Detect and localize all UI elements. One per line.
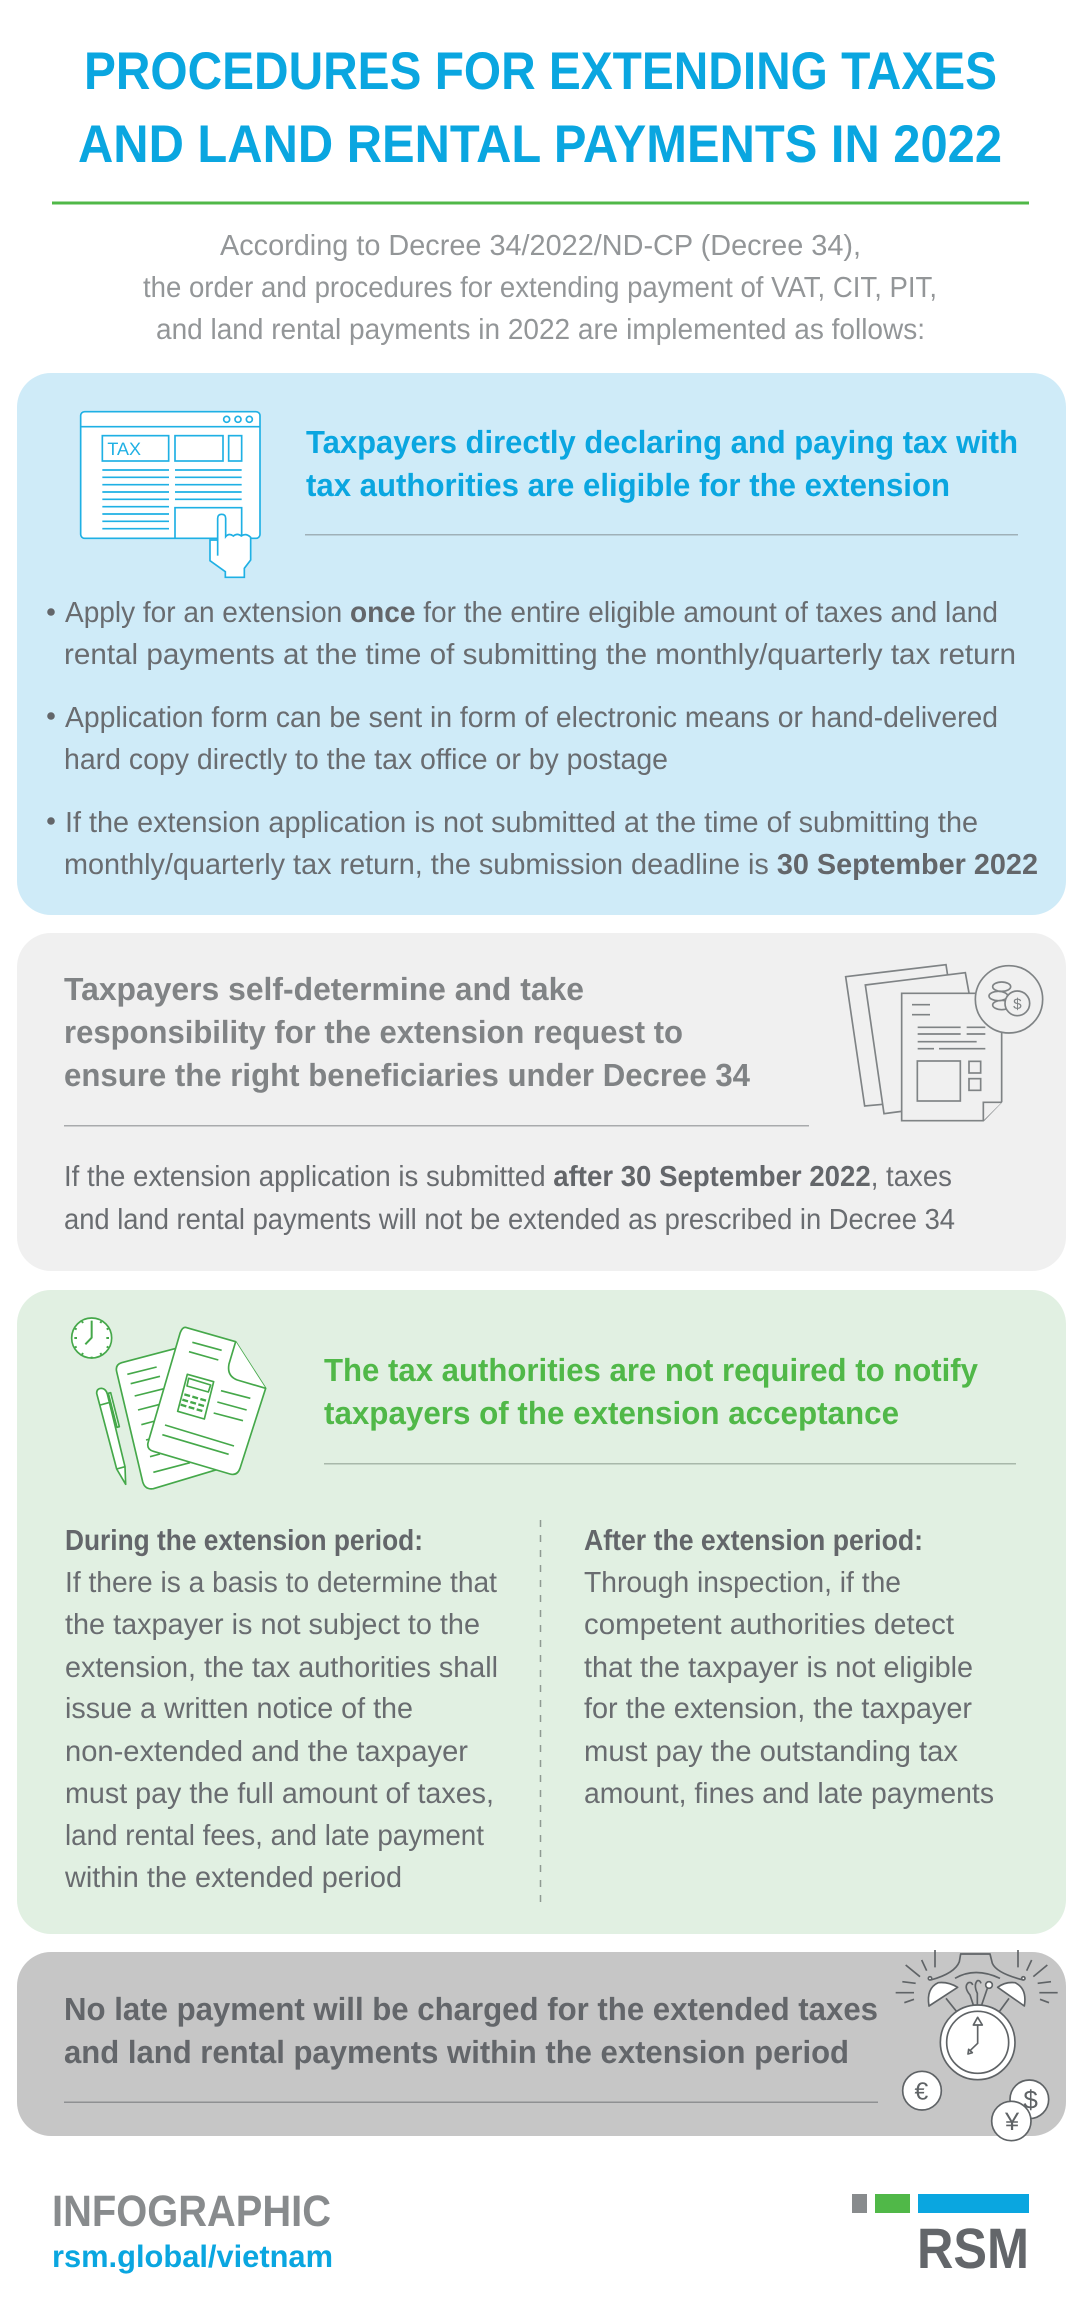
- column: during the extension period: extension, the tax authorities shall: [65, 1652, 498, 1684]
- logo: RSM: RSM: [917, 2217, 1029, 2281]
- column: during the extension period: [64, 1525, 498, 1894]
- panel: self-determination: [17, 933, 1066, 1271]
- icon: alarm clock and currency coins: €: [914, 2077, 928, 2105]
- panel: no notification: [17, 1290, 1066, 1934]
- heading: no late payment: and land rental payments within the extension period: [64, 2034, 849, 2070]
- footer: infographic label: INFOGRAPHIC: [52, 2187, 331, 2236]
- heading: self-determination: responsibility for the extension request to: [64, 1014, 683, 1050]
- icon: alarm clock and currency coins: $: [1023, 2085, 1038, 2114]
- heading: self-determination: [64, 971, 750, 1093]
- column: after the extension period: Through inspection, if the: [584, 1567, 901, 1599]
- panel: direct declaration: [17, 373, 1066, 915]
- column: after the extension period: for the extension, the taxpayer: [584, 1693, 972, 1725]
- body text: deadline: If the extension application is submitted after 30 September 2022, taxes: [64, 1161, 952, 1193]
- heading: no notification: [324, 1352, 978, 1431]
- bullet list: If the extension application is not submitted at the time of submitting the: [65, 807, 978, 839]
- panel: no late payment: [17, 1950, 1066, 2141]
- icon: tax form with hand: [81, 412, 260, 577]
- column: during the extension period: within the extended period: [64, 1862, 402, 1894]
- column: after the extension period: After the extension period:: [584, 1525, 923, 1557]
- heading: self-determination: ensure the right beneficiaries under Decree 34: [64, 1057, 750, 1093]
- heading: no late payment: [64, 1991, 878, 2070]
- heading: direct declaration: [306, 424, 1018, 503]
- column: during the extension period: non-extended and the taxpayer: [65, 1736, 468, 1768]
- intro text: [143, 230, 937, 346]
- icon: alarm clock and currency coins: ¥: [1005, 2107, 1019, 2136]
- icon: documents, clock and pen: [72, 1318, 266, 1489]
- heading: self-determination: Taxpayers self-determine and take: [64, 971, 584, 1007]
- footer: infographic label: [52, 2187, 333, 2274]
- icon: documents and coins: [846, 965, 1043, 1121]
- icon: tax form with hand: TAX: [107, 439, 141, 459]
- column: after the extension period: amount, fines and late payments: [584, 1778, 994, 1810]
- column: after the extension period: must pay the outstanding tax: [584, 1736, 958, 1768]
- column: during the extension period: During the extension period:: [65, 1525, 423, 1557]
- bullet list: Application form can be sent in form of electronic means or hand-delivered: [65, 702, 998, 734]
- bullet list: Apply for an extension once for the entire eligible amount of taxes and land: [65, 597, 998, 629]
- column: during the extension period: issue a written notice of the: [65, 1693, 413, 1725]
- body text: deadline: [64, 1161, 955, 1236]
- column: during the extension period: must pay the full amount of taxes,: [65, 1778, 494, 1810]
- column: after the extension period: [584, 1525, 994, 1810]
- column: after the extension period: that the taxpayer is not eligible: [584, 1652, 973, 1684]
- footer: infographic label: rsm.global/vietnam: [52, 2239, 333, 2274]
- title: AND LAND RENTAL PAYMENTS IN 2022: [78, 115, 1002, 174]
- bullet list: rental payments at the time of submitting the monthly/quarterly tax return: [64, 639, 1016, 671]
- title: [78, 42, 1002, 174]
- body text: deadline: and land rental payments will not be extended as prescribed in Decree 34: [64, 1204, 955, 1236]
- heading: no notification: taxpayers of the extension acceptance: [324, 1395, 899, 1431]
- bullet list: hard copy directly to the tax office or by postage: [64, 744, 668, 776]
- icon: documents and coins: $: [1013, 995, 1022, 1012]
- intro text: and land rental payments in 2022 are implemented as follows:: [156, 314, 925, 346]
- heading: direct declaration: Taxpayers directly declaring and paying tax with: [306, 424, 1018, 460]
- column: during the extension period: the taxpayer is not subject to the: [65, 1609, 480, 1641]
- intro text: the order and procedures for extending payment of VAT, CIT, PIT,: [143, 272, 937, 304]
- logo: RSM: [852, 2194, 1029, 2281]
- column: after the extension period: competent authorities detect: [584, 1609, 954, 1641]
- bullet list: [47, 597, 1038, 881]
- title: PROCEDURES FOR EXTENDING TAXES: [84, 42, 997, 101]
- icon: alarm clock and currency coins: [896, 1950, 1058, 2141]
- heading: no notification: The tax authorities are not required to notify: [324, 1352, 978, 1388]
- column: during the extension period: If there is a basis to determine that: [65, 1567, 497, 1599]
- column: during the extension period: land rental fees, and late payment: [65, 1820, 484, 1852]
- heading: no late payment: No late payment will be charged for the extended taxes: [64, 1991, 878, 2027]
- bullet list: monthly/quarterly tax return, the submission deadline is 30 September 2022: [64, 849, 1038, 881]
- intro text: According to Decree 34/2022/ND-CP (Decree 34),: [220, 230, 861, 262]
- heading: direct declaration: tax authorities are eligible for the extension: [306, 467, 950, 503]
